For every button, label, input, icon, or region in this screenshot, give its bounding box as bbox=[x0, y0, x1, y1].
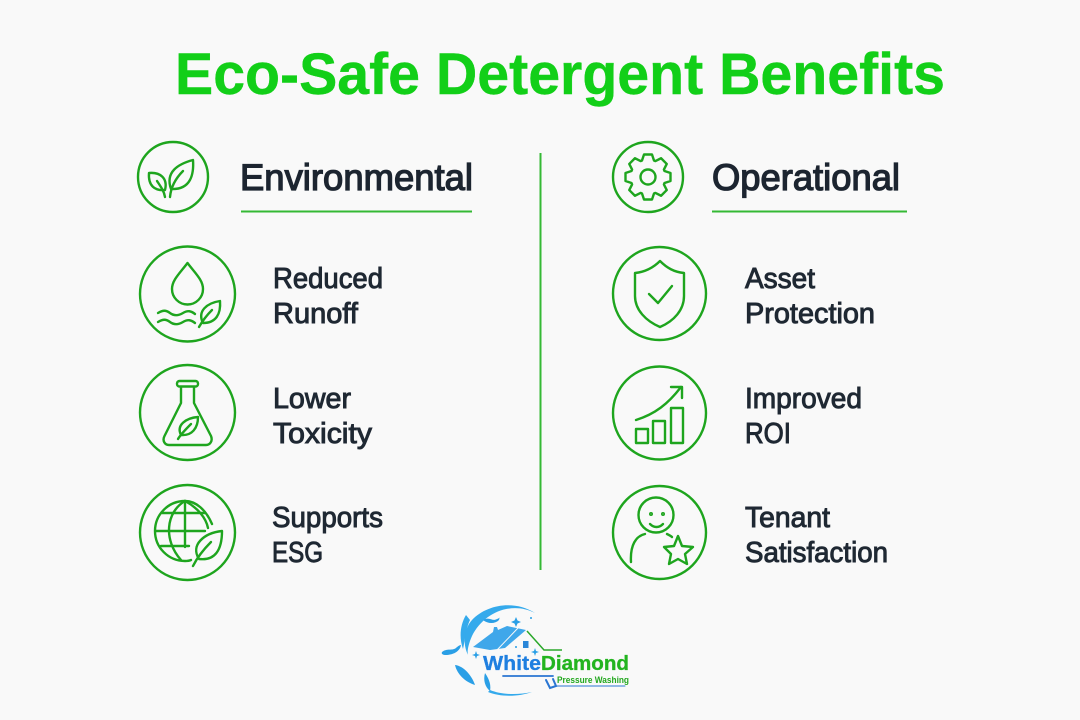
icon: water drop with leaf bbox=[140, 246, 235, 342]
label: tenant satisfaction: Tenant bbox=[745, 502, 830, 534]
logo tagline: Pressure Washing bbox=[557, 675, 629, 685]
icon: globe with leaf bbox=[140, 485, 235, 580]
logo window bbox=[523, 641, 528, 648]
heading: environmental: Environmental bbox=[240, 157, 473, 198]
logo splashes bbox=[442, 618, 500, 691]
label: improved roi: ROI bbox=[745, 418, 791, 450]
logo: white diamond pressure washing bbox=[442, 605, 629, 696]
label: tenant satisfaction: Satisfaction bbox=[745, 537, 888, 569]
icon: flask with leaf bbox=[140, 365, 235, 460]
label: lower toxicity: Toxicity bbox=[273, 418, 373, 450]
label: asset protection: Protection bbox=[745, 298, 875, 330]
title: Eco-Safe Detergent Benefits bbox=[175, 42, 945, 107]
heading underline bbox=[241, 210, 472, 212]
label: asset protection: Asset bbox=[745, 263, 815, 295]
icon: leaves bbox=[138, 142, 208, 212]
icon: gear bbox=[613, 142, 683, 212]
logo sparkles bbox=[472, 617, 539, 659]
label: reduced runoff: Runoff bbox=[273, 298, 358, 330]
label: supports esg: Supports bbox=[272, 502, 383, 534]
icon: smiling person with star bbox=[613, 486, 706, 579]
label: lower toxicity: Lower bbox=[273, 383, 352, 415]
logo swirl bbox=[461, 605, 535, 696]
icon: growth chart bbox=[613, 366, 706, 460]
heading underline bbox=[712, 210, 907, 212]
logo spray wand bbox=[503, 676, 625, 688]
panel: environmental bbox=[138, 142, 473, 580]
panel: operational bbox=[613, 142, 907, 579]
logo wordmark: WhiteDiamond bbox=[483, 652, 629, 675]
center divider bbox=[540, 153, 542, 570]
heading: operational: Operational bbox=[712, 157, 900, 198]
label: improved roi: Improved bbox=[745, 383, 862, 415]
label: reduced runoff: Reduced bbox=[273, 263, 383, 295]
logo house outline bbox=[527, 631, 562, 650]
logo house roof bbox=[473, 626, 526, 650]
label: supports esg: ESG bbox=[272, 537, 323, 569]
icon: shield with check bbox=[613, 247, 706, 340]
